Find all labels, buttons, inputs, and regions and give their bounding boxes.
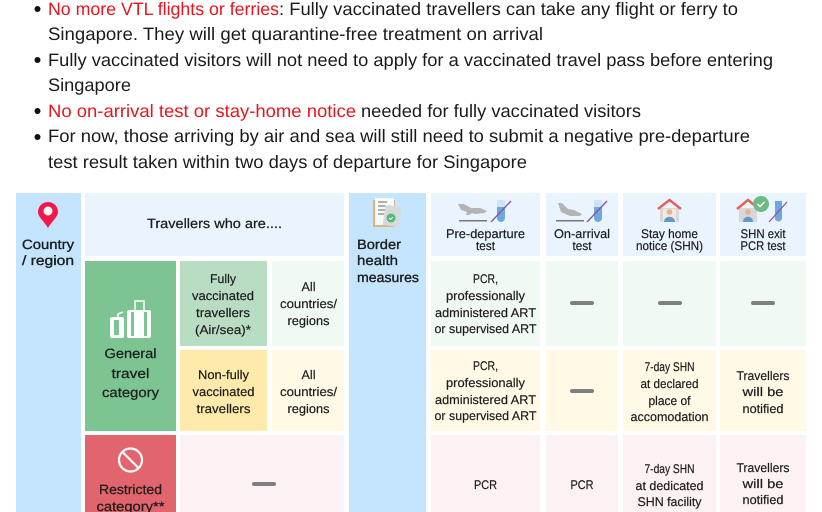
cell: fully vaccinated travellers: vaccinated — [192, 289, 254, 303]
panel: border health measures column: health — [357, 253, 398, 268]
row: non-fully vaccinated measures: will be — [741, 385, 784, 399]
panel: restricted category — [85, 435, 176, 512]
row: non-fully vaccinated measures — [431, 350, 806, 431]
bullet list: Fully vaccinated visitors will not need to apply for a vaccinated travel pass before entering — [48, 50, 773, 70]
icon: luggage — [110, 301, 151, 338]
bullet list: needed for fully vaccinated visitors — [361, 101, 641, 121]
header: on-arrival test — [546, 193, 618, 256]
header: pre-departure test — [431, 193, 540, 256]
cell: all countries, non-fully vaccinated: regions — [288, 402, 330, 416]
header: stay home notice: notice (SHN) — [636, 239, 703, 253]
panel: country / region column — [16, 193, 81, 512]
row: restricted measures: 7-day SHN — [644, 462, 694, 476]
heading: travellers who are: Travellers who are.... — [147, 216, 282, 231]
cell: all countries, fully vaccinated — [272, 261, 344, 346]
row: non-fully vaccinated measures: notified — [742, 402, 784, 416]
bullet list — [34, 0, 773, 172]
row: non-fully vaccinated measures: at declared — [640, 377, 699, 391]
row: non-fully vaccinated measures: Travellers — [736, 369, 790, 383]
cell: non-fully vaccinated travellers: vaccinated — [192, 385, 255, 399]
header: pre-departure test: test — [476, 239, 495, 253]
header: stay home notice — [623, 193, 716, 256]
cell: restricted none — [180, 435, 344, 512]
row: restricted measures — [431, 435, 806, 512]
icon: plane departing and test tube — [458, 200, 511, 222]
bullet list: Singapore. They will get quarantine-free treatment on arrival — [48, 24, 543, 44]
panel: country / region column: / region — [22, 253, 74, 268]
bullet list: test result taken within two days of departure for Singapore — [48, 152, 527, 172]
cell: all countries, fully vaccinated: All — [302, 280, 316, 294]
header: SHN exit PCR test: PCR test — [740, 239, 786, 253]
bullet list: Singapore — [48, 75, 131, 95]
panel: border health measures column — [349, 193, 426, 512]
bullet list: No on-arrival test or stay-home notice — [48, 101, 356, 121]
row: non-fully vaccinated measures: professionally — [446, 376, 526, 390]
panel: border health measures column: Border — [357, 237, 402, 252]
row: restricted measures: at dedicated — [636, 479, 704, 493]
icon: house with person — [658, 200, 681, 222]
row: fully vaccinated measures: professionally — [446, 289, 526, 303]
row: fully vaccinated measures: administered ART — [435, 306, 536, 320]
header: SHN exit PCR test — [720, 193, 806, 256]
row: restricted measures: Travellers — [736, 461, 790, 475]
row: fully vaccinated measures — [431, 261, 806, 346]
cell: non-fully vaccinated travellers — [180, 350, 267, 431]
row: non-fully vaccinated measures: administered ART — [435, 393, 536, 407]
icon: location pin — [38, 202, 58, 228]
icon: house, check badge and test tube — [737, 196, 787, 222]
cell: fully vaccinated travellers: Fully — [210, 272, 237, 286]
cell: fully vaccinated travellers — [180, 261, 267, 346]
panel: country / region column: Country — [22, 237, 74, 252]
cell: fully vaccinated travellers: travellers — [196, 306, 250, 320]
icon: documents — [373, 198, 401, 227]
panel: general travel category: General — [104, 346, 156, 361]
header: pre-departure test: Pre-departure — [446, 227, 525, 241]
row: restricted measures: PCR — [474, 478, 497, 492]
header: on-arrival test: test — [572, 239, 592, 253]
row: non-fully vaccinated measures: accomodation — [630, 410, 709, 424]
header: SHN exit PCR test: SHN exit — [740, 227, 786, 241]
row: non-fully vaccinated measures: 7-day SHN — [644, 360, 694, 374]
panel: restricted category: Restricted — [99, 482, 162, 497]
row: fully vaccinated measures: or supervised ART — [434, 322, 537, 336]
row: restricted measures: will be — [741, 477, 784, 491]
cell: non-fully vaccinated travellers: travellers — [196, 402, 250, 416]
cell: all countries, non-fully vaccinated: All — [302, 368, 316, 382]
row: restricted measures: SHN facility — [638, 495, 702, 509]
panel: general travel category: category — [102, 385, 159, 400]
bullet list: For now, those arriving by air and sea will still need to submit a negative pre-departure — [48, 126, 750, 146]
row: non-fully vaccinated measures: or supervised ART — [434, 409, 537, 423]
row: fully vaccinated measures: PCR, — [473, 272, 498, 286]
row: restricted measures: notified — [742, 493, 784, 507]
icon: plane landing and test tube — [556, 200, 607, 222]
header: on-arrival test: On-arrival — [554, 227, 610, 241]
row: restricted measures: PCR — [570, 478, 594, 492]
cell: all countries, fully vaccinated: countries/ — [280, 297, 338, 311]
row: non-fully vaccinated measures: PCR, — [473, 359, 498, 373]
cell: non-fully vaccinated travellers: Non-fully — [198, 368, 250, 382]
cell: all countries, non-fully vaccinated: countries/ — [280, 385, 338, 399]
cell: fully vaccinated travellers: (Air/sea)* — [195, 323, 251, 337]
row: non-fully vaccinated measures: place of — [648, 394, 691, 408]
panel: border health measures column: measures — [357, 270, 419, 285]
panel: general travel category: travel — [112, 366, 150, 381]
icon: prohibited sign — [119, 448, 142, 472]
cell: all countries, fully vaccinated: regions — [288, 314, 330, 328]
heading: travellers who are — [85, 193, 344, 256]
panel: general travel category — [85, 261, 176, 431]
header: stay home notice: Stay home — [641, 227, 698, 241]
cell: all countries, non-fully vaccinated — [272, 350, 344, 431]
